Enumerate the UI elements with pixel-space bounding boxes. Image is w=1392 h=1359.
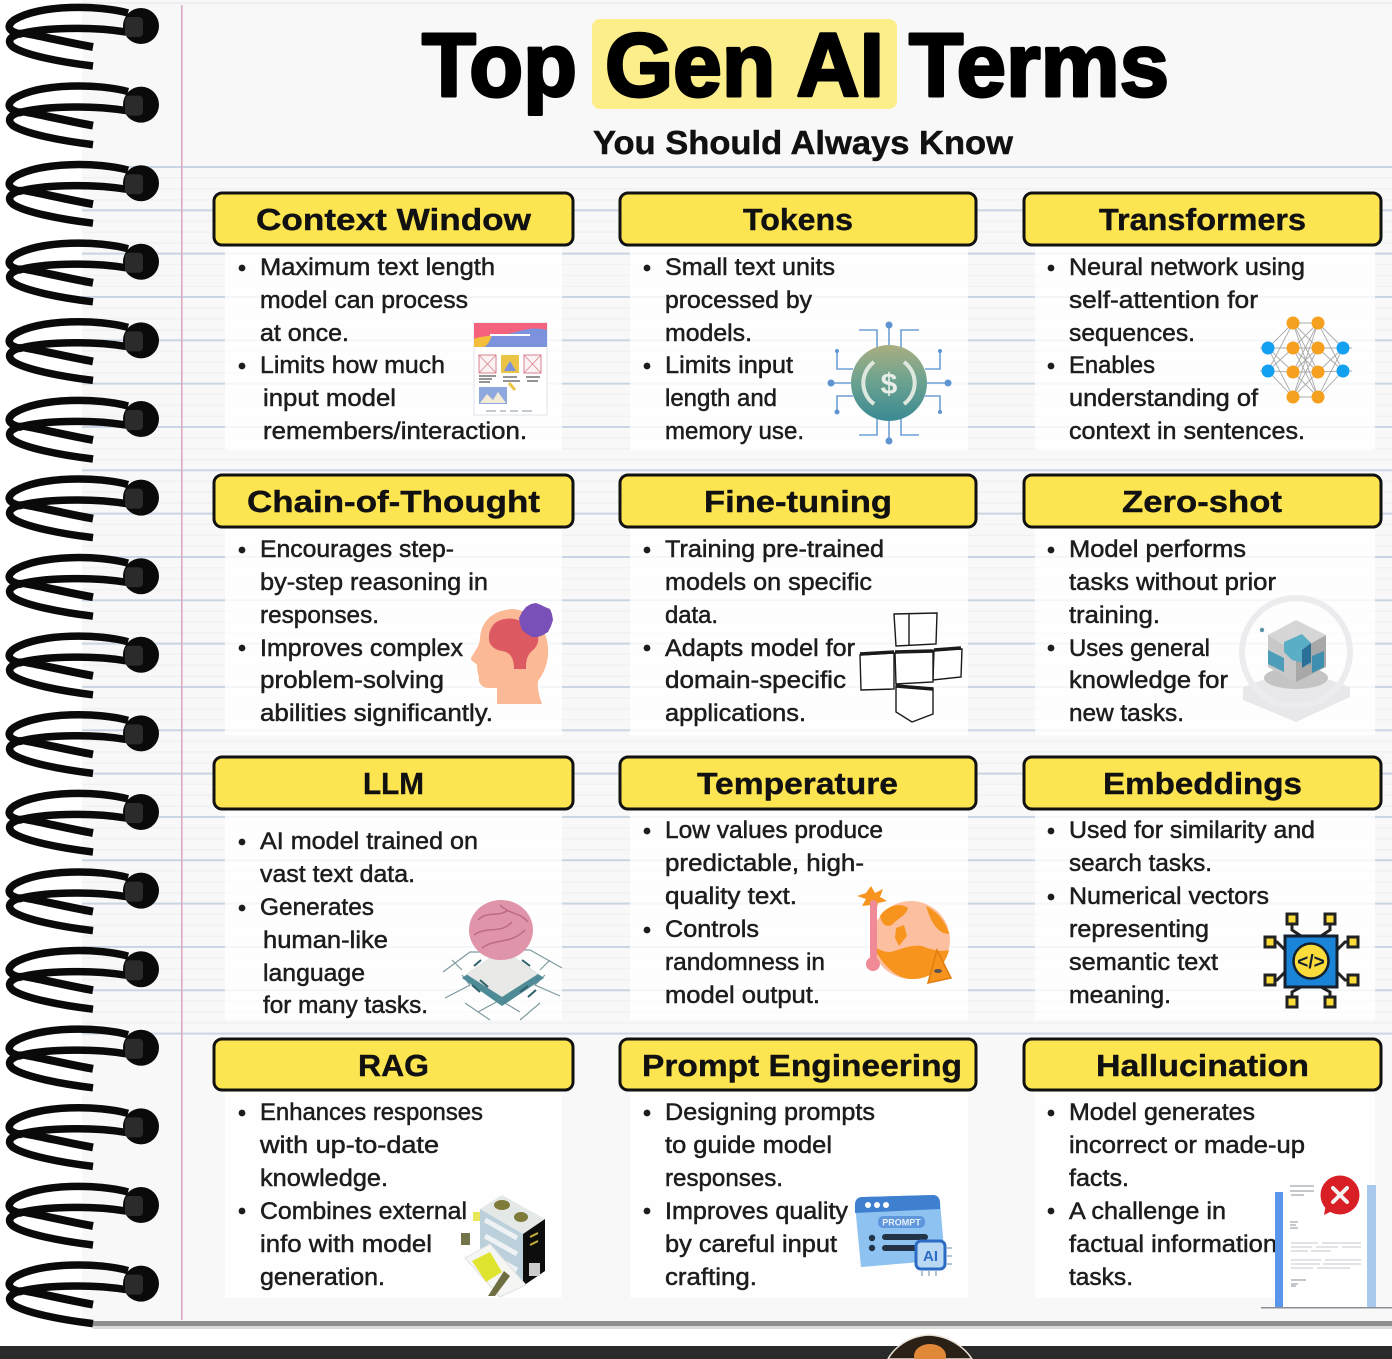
title: Terms bbox=[909, 16, 1169, 116]
text: Hallucination: incorrect or made-up bbox=[1069, 1132, 1305, 1159]
text: Transformers: context in sentences. bbox=[1069, 418, 1305, 445]
text: Tokens: memory use. bbox=[665, 418, 804, 445]
panel: Hallucination bbox=[1024, 1039, 1392, 1308]
text: Fine-tuning: models on specific bbox=[665, 569, 872, 596]
text: Transformers: self-attention for bbox=[1069, 287, 1258, 314]
heading: Tokens bbox=[620, 193, 976, 245]
text: Transformers: sequences. bbox=[1069, 320, 1195, 347]
text: Fine-tuning: applications. bbox=[665, 700, 806, 727]
text: LLM: for many tasks. bbox=[263, 992, 428, 1019]
panel: Chain-of-Thought bbox=[214, 475, 573, 735]
text: Prompt Engineering: Improves quality bbox=[665, 1198, 848, 1225]
text: Chain-of-Thought: Improves complex bbox=[260, 635, 463, 662]
icon: brain on chip bbox=[443, 900, 562, 1020]
panel: Embeddings bbox=[1024, 757, 1381, 1020]
text: Embeddings: Used for similarity and bbox=[1069, 817, 1315, 844]
text: Embeddings: representing bbox=[1069, 916, 1209, 943]
heading: Chain-of-Thought: Chain-of-Thought bbox=[247, 484, 540, 519]
text: Chain-of-Thought: problem-solving bbox=[260, 667, 444, 694]
presenter head at bottom bbox=[888, 1335, 972, 1359]
panel: Context Window bbox=[214, 193, 573, 450]
panel: Transformers bbox=[1024, 193, 1381, 450]
text: Tokens: processed by bbox=[665, 287, 812, 314]
panel: Prompt Engineering bbox=[620, 1039, 976, 1298]
heading: Chain-of-Thought bbox=[214, 475, 573, 527]
icon: server and documents bbox=[461, 1195, 545, 1297]
heading: Prompt Engineering: Prompt Engineering bbox=[642, 1048, 962, 1083]
text: Tokens bbox=[644, 254, 835, 445]
title bbox=[422, 16, 1169, 116]
icon: token coin with circuits: $ bbox=[881, 368, 898, 401]
text: Prompt Engineering: responses. bbox=[665, 1165, 783, 1192]
heading: Transformers: Transformers bbox=[1099, 202, 1306, 237]
text: Temperature: randomness in bbox=[665, 949, 825, 976]
text: RAG: info with model bbox=[260, 1231, 432, 1258]
text: Transformers: Neural network using bbox=[1069, 254, 1305, 281]
text: Context Window: remembers/interaction. bbox=[263, 418, 527, 445]
heading: Fine-tuning: Fine-tuning bbox=[704, 484, 892, 519]
text: LLM: AI model trained on bbox=[260, 828, 478, 855]
heading: Context Window bbox=[214, 193, 573, 245]
text: Temperature bbox=[644, 817, 883, 1009]
text: Prompt Engineering: to guide model bbox=[665, 1132, 832, 1159]
text: Fine-tuning: Adapts model for bbox=[665, 635, 855, 662]
text: RAG: generation. bbox=[260, 1264, 385, 1291]
text: LLM: human-like bbox=[263, 927, 388, 954]
text: Chain-of-Thought: Encourages step- bbox=[260, 536, 454, 563]
text: RAG: knowledge. bbox=[260, 1165, 388, 1192]
text: Chain-of-Thought: by-step reasoning in bbox=[260, 569, 488, 596]
icon: assembled cubes bbox=[860, 613, 962, 722]
icon: head with brain and gear bbox=[471, 603, 553, 704]
text: Hallucination: Model generates bbox=[1069, 1099, 1255, 1126]
text: LLM: Generates bbox=[260, 894, 374, 921]
subtitle: You Should Always Know bbox=[593, 124, 1013, 161]
text: LLM bbox=[239, 828, 478, 1019]
text: Fine-tuning bbox=[644, 536, 884, 727]
text: Zero-shot: tasks without prior bbox=[1069, 569, 1276, 596]
text: Prompt Engineering: crafting. bbox=[665, 1264, 757, 1291]
text: Fine-tuning: domain-specific bbox=[665, 667, 846, 694]
icon: code chip: </> bbox=[1297, 952, 1325, 973]
text: Context Window bbox=[239, 254, 527, 445]
icon: overheated globe with thermometer bbox=[857, 886, 951, 983]
heading: Embeddings: Embeddings bbox=[1103, 766, 1302, 801]
text: Transformers: Enables bbox=[1069, 352, 1155, 379]
heading: LLM bbox=[214, 757, 573, 809]
heading: Tokens: Tokens bbox=[743, 202, 853, 237]
text: Prompt Engineering: by careful input bbox=[665, 1231, 837, 1258]
text: Tokens: models. bbox=[665, 320, 752, 347]
heading: RAG bbox=[214, 1039, 573, 1090]
text: Fine-tuning: Training pre-trained bbox=[665, 536, 884, 563]
text: Context Window: at once. bbox=[260, 320, 349, 347]
panel: RAG bbox=[214, 1039, 573, 1298]
text: Prompt Engineering: Designing prompts bbox=[665, 1099, 875, 1126]
text: Embeddings: search tasks. bbox=[1069, 850, 1212, 877]
title: Gen AI bbox=[605, 16, 884, 116]
text: RAG: Combines external bbox=[260, 1198, 467, 1225]
text: Embeddings: Numerical vectors bbox=[1069, 883, 1269, 910]
heading: Temperature: Temperature bbox=[697, 766, 898, 801]
panel: Fine-tuning bbox=[620, 475, 976, 735]
heading: Prompt Engineering bbox=[620, 1039, 976, 1090]
text: LLM: language bbox=[263, 960, 365, 987]
text: Hallucination: factual information bbox=[1069, 1231, 1277, 1258]
icon: cube in glass sphere on base bbox=[1242, 598, 1350, 722]
text: Chain-of-Thought bbox=[239, 536, 493, 727]
text: Temperature: model output. bbox=[665, 982, 820, 1009]
text: Tokens: Limits input bbox=[665, 352, 793, 379]
heading: LLM: LLM bbox=[363, 766, 424, 801]
heading: Hallucination bbox=[1024, 1039, 1381, 1090]
text: Prompt Engineering bbox=[644, 1099, 875, 1291]
icon: prompt window with AI chip: PROMPT bbox=[882, 1218, 921, 1228]
panel: LLM bbox=[214, 757, 573, 1020]
text: Context Window: model can process bbox=[260, 287, 468, 314]
text: Temperature: quality text. bbox=[665, 883, 797, 910]
text: Transformers: understanding of bbox=[1069, 385, 1258, 412]
icon: neural network bbox=[1260, 316, 1352, 404]
text: RAG: Enhances responses bbox=[260, 1099, 483, 1126]
text: Transformers bbox=[1048, 254, 1305, 445]
text: Temperature: Low values produce bbox=[665, 817, 883, 844]
icon: document with error mark bbox=[1261, 1176, 1392, 1308]
text: Zero-shot: Model performs bbox=[1069, 536, 1246, 563]
text: Hallucination bbox=[1048, 1099, 1305, 1291]
heading: Transformers bbox=[1024, 193, 1381, 245]
title: Top bbox=[422, 16, 577, 116]
text: Zero-shot bbox=[1048, 536, 1276, 727]
text: Context Window: input model bbox=[263, 385, 396, 412]
text: Tokens: length and bbox=[665, 385, 777, 412]
heading: Embeddings bbox=[1024, 757, 1381, 809]
icon: token coin with circuits bbox=[828, 322, 952, 444]
text: Zero-shot: Uses general bbox=[1069, 635, 1210, 662]
text: Tokens: Small text units bbox=[665, 254, 835, 281]
heading: Zero-shot: Zero-shot bbox=[1122, 484, 1282, 519]
text: Context Window: Limits how much bbox=[260, 352, 445, 379]
panel: Temperature bbox=[620, 757, 976, 1020]
text: Temperature: Controls bbox=[665, 916, 759, 943]
heading: Context Window: Context Window bbox=[256, 202, 532, 237]
icon: prompt window with AI chip bbox=[855, 1195, 952, 1276]
icon: code chip bbox=[1265, 914, 1358, 1007]
text: RAG: with up-to-date bbox=[259, 1132, 439, 1159]
text: Hallucination: facts. bbox=[1069, 1165, 1129, 1192]
text: Zero-shot: knowledge for bbox=[1069, 667, 1228, 694]
text: Temperature: predictable, high- bbox=[665, 850, 864, 877]
text: Zero-shot: training. bbox=[1069, 602, 1160, 629]
text: Hallucination: tasks. bbox=[1069, 1264, 1133, 1291]
text: Fine-tuning: data. bbox=[665, 602, 718, 629]
panel: Tokens bbox=[620, 193, 976, 450]
heading: RAG: RAG bbox=[358, 1048, 429, 1083]
heading: Zero-shot bbox=[1024, 475, 1381, 527]
text: Embeddings: meaning. bbox=[1069, 982, 1171, 1009]
spiral binding bbox=[9, 7, 159, 1324]
text: Embeddings bbox=[1048, 817, 1315, 1009]
heading: Fine-tuning bbox=[620, 475, 976, 527]
text: Embeddings: semantic text bbox=[1069, 949, 1218, 976]
text: Context Window: Maximum text length bbox=[260, 254, 495, 281]
text: Chain-of-Thought: responses. bbox=[260, 602, 379, 629]
text: Hallucination: A challenge in bbox=[1069, 1198, 1226, 1225]
heading: Hallucination: Hallucination bbox=[1096, 1048, 1309, 1083]
text: Chain-of-Thought: abilities significantly. bbox=[260, 700, 493, 727]
text: LLM: vast text data. bbox=[260, 861, 415, 888]
icon: prompt window with AI chip: AI bbox=[923, 1248, 938, 1265]
panel: Zero-shot bbox=[1024, 475, 1381, 735]
icon: web page layout bbox=[474, 323, 547, 415]
heading: Temperature bbox=[620, 757, 976, 809]
text: Zero-shot: new tasks. bbox=[1069, 700, 1184, 727]
text: RAG bbox=[239, 1099, 483, 1291]
